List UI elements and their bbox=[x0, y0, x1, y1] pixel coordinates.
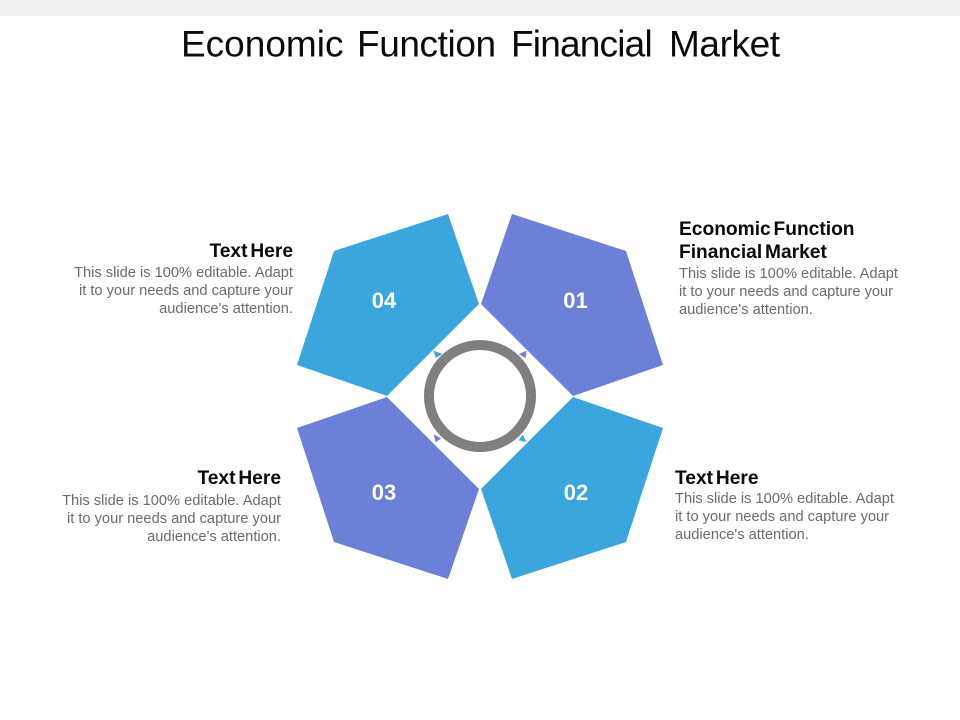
center ring bbox=[429, 345, 531, 447]
text block 01: Economic Function bbox=[679, 219, 855, 240]
text block 01: This slide is 100% editable. Adapt bbox=[679, 266, 898, 282]
text block 01: audience's attention. bbox=[679, 302, 813, 318]
pentagon 01: 01 bbox=[563, 288, 588, 313]
text block 02: it to your needs and capture your bbox=[675, 509, 889, 525]
text block 02: audience's attention. bbox=[675, 527, 809, 543]
text block 04: audience's attention. bbox=[159, 301, 293, 317]
text block 03: This slide is 100% editable. Adapt bbox=[62, 493, 281, 509]
pentagon 04: 04 bbox=[372, 288, 397, 313]
text block 03: audience's attention. bbox=[147, 529, 281, 545]
top band bbox=[0, 0, 960, 16]
text block 04: This slide is 100% editable. Adapt bbox=[74, 265, 293, 281]
text block 04 bbox=[74, 241, 293, 317]
pentagon 03 bbox=[297, 397, 479, 579]
arrowhead bottom left bbox=[434, 434, 441, 442]
text block 04: it to your needs and capture your bbox=[79, 283, 293, 299]
text block 02 bbox=[675, 468, 894, 543]
pentagon 04 bbox=[297, 214, 479, 396]
text block 03: it to your needs and capture your bbox=[67, 511, 281, 527]
text block 03: Text Here bbox=[197, 468, 281, 489]
title: Function bbox=[357, 24, 496, 64]
pentagon 01 bbox=[481, 214, 663, 396]
title: Economic bbox=[181, 24, 343, 64]
text block 03 bbox=[62, 468, 281, 545]
text block 02: Text Here bbox=[675, 468, 759, 489]
arrowhead top right bbox=[519, 350, 526, 358]
pentagon 03: 03 bbox=[372, 480, 396, 505]
title: Financial bbox=[511, 24, 652, 64]
title: Market bbox=[669, 24, 781, 64]
text block 01 bbox=[679, 219, 898, 318]
text block 01: Financial Market bbox=[679, 242, 827, 263]
pentagon 02 bbox=[481, 397, 663, 579]
arrowhead top left bbox=[434, 350, 442, 358]
text block 02: This slide is 100% editable. Adapt bbox=[675, 491, 894, 507]
text block 04: Text Here bbox=[209, 241, 293, 262]
title bbox=[181, 24, 781, 64]
pentagon 02: 02 bbox=[564, 480, 588, 505]
text block 01: it to your needs and capture your bbox=[679, 284, 893, 300]
arrowhead bottom right bbox=[519, 434, 526, 442]
